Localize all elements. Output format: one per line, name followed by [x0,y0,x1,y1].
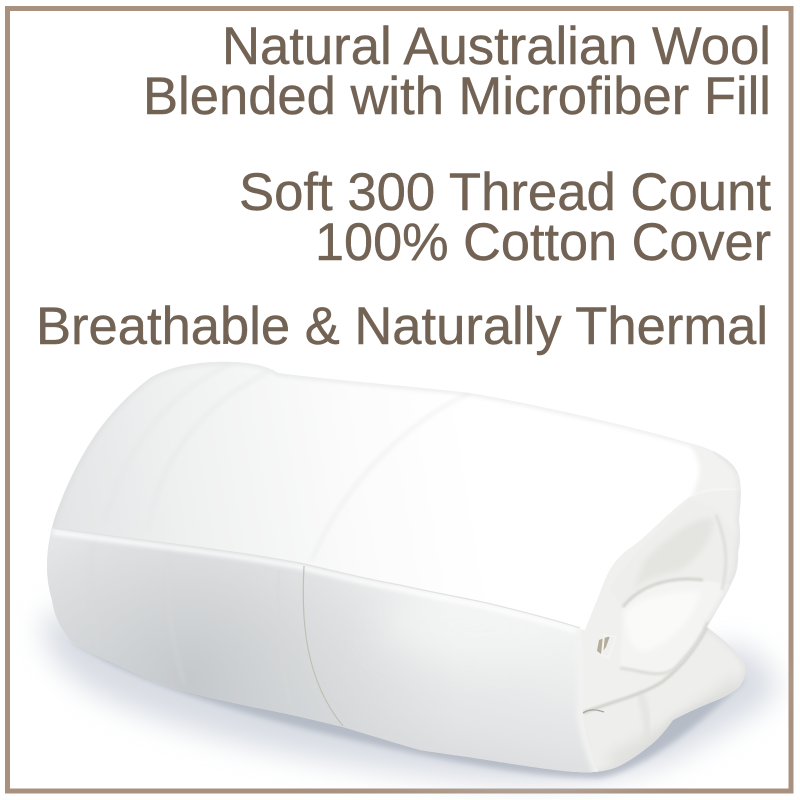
heading: cotton cover [239,163,771,272]
upper roll [622,515,728,608]
heading: breathable and thermal: Breathable & Naturally Thermal [36,297,768,356]
heading: wool and microfiber fill [143,17,771,126]
soft outline shading [126,362,744,772]
heading: wool and microfiber fill: Blended with Microfiber Fill [143,67,771,126]
middle roll [583,592,708,714]
floor shadow [44,610,778,783]
cloth wrinkle streaks [91,535,185,685]
heading: wool and microfiber fill: Natural Australian Wool [222,17,771,76]
side base [222,451,741,772]
seam ridge highlight [53,532,580,632]
front right highlight [380,595,560,655]
image: rolled white comforter [40,355,778,790]
top panel streaks [105,364,470,560]
heading: cotton cover: 100% Cotton Cover [315,213,771,272]
front band [278,570,295,715]
front panel right edge light [579,700,598,772]
lower folded layer [600,679,738,772]
front panel [47,528,598,772]
vertical seam, front [303,566,343,726]
top panel [52,370,712,630]
horizontal seam [53,528,580,628]
top right corner shading [693,448,740,495]
heading: cotton cover: Soft 300 Thread Count [239,163,771,222]
ties at side of quilt [582,636,610,714]
quilt body [40,355,760,790]
